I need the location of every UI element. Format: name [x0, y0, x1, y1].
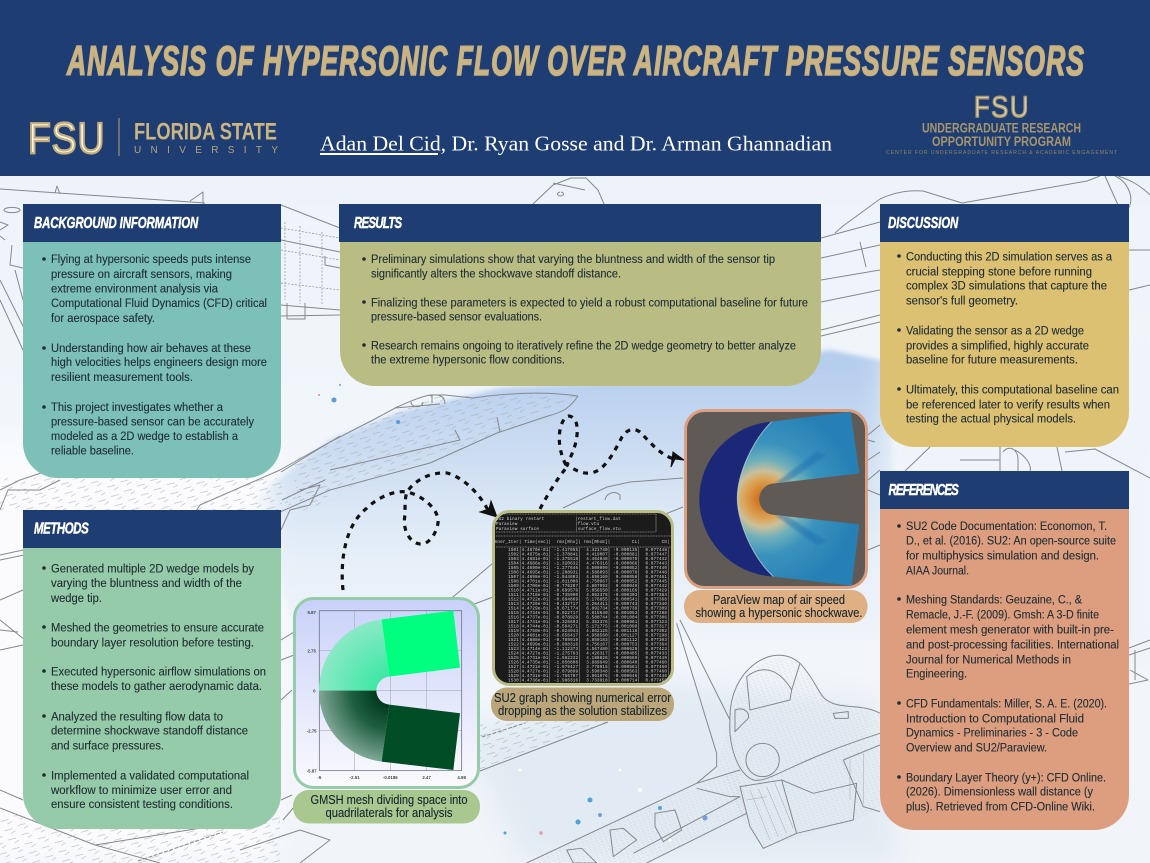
figure: SU2 terminal residual output: 1505|4.4690e-01| -1.277646| 4.500999| -0.000052| 0.077440| — [492, 566, 670, 571]
text: discussion bullets: sensor's full geometry. — [906, 294, 1018, 308]
text: references bullets: D., et al. (2016). SU2: An open-source suite — [906, 534, 1116, 548]
figure: SU2 terminal residual output: 1525|4.4731e-01| -1.562232| 4.188826| -0.000569| 0.077449| — [492, 656, 670, 661]
logo: Undergraduate Research Opportunity Program — [886, 90, 1118, 156]
text: references bullets: (2026). Dimensionless wall distance (y — [906, 784, 1094, 798]
caption: ParaView map: showing a hypersonic shockwave. — [696, 606, 862, 620]
background: top-left aircraft line drawing — [0, 186, 340, 350]
caption: SU2 graph — [491, 688, 674, 721]
figure: SU2 terminal residual output — [492, 512, 672, 684]
plot axis tick labels — [307, 610, 466, 780]
text: references bullets: Meshing Standards: Geuzaine, C., & — [906, 592, 1083, 606]
text: discussion bullets: Ultimately, this computational baseline can — [906, 382, 1119, 396]
figure: SU2 terminal residual output: 1518|4.4744e-01| -0.594271| 5.171775| -0.001098| 0.077317| — [492, 624, 670, 630]
figure: SU2 terminal residual output: Paraview surface — [496, 527, 539, 532]
figure: SU2 terminal residual output: 1516|4.4737e-01| -0.078929| 6.580744| -0.001004| 0.077306| — [492, 616, 670, 620]
header banner — [0, 0, 1150, 176]
figure: SU2 terminal residual output: 1514|4.4729e-01| -0.671774| 6.892734| -0.000739| 0.077309| — [492, 606, 670, 612]
caption: SU2 graph: SU2 graph showing numerical error — [494, 691, 671, 705]
heading: methods: METHODS — [34, 520, 89, 537]
text: methods bullets: Analyzed the resulting flow data to — [51, 710, 223, 724]
text: references bullets: Journal for Numerical Methods in — [906, 652, 1071, 666]
figure: SU2 terminal residual output: 1528|4.4727e-01| -2.079899| 3.590348| -0.000563| 0.077460| — [492, 670, 670, 674]
text: results bullets: the extreme hypersonic flow conditions. — [371, 352, 565, 366]
text: discussion bullets: testing the actual physical models. — [906, 412, 1076, 426]
background: top-right aircraft line drawing — [533, 176, 1150, 684]
text: methods bullets: Generated multiple 2D wedge models by — [51, 562, 255, 576]
figure: SU2 terminal residual output: 1511|4.4716e-01| -0.735990| 4.962376| -0.000303| 0.077384| — [492, 593, 670, 598]
text: methods bullets: these models to gather aerodynamic data. — [51, 679, 262, 693]
text: discussion bullets — [897, 250, 1119, 426]
text: methods bullets: determine shockwave standoff distance — [51, 724, 248, 738]
figure: SU2 terminal residual output: 1504|4.4686e-01| -1.320632| 4.476316| -0.000066| 0.077443| — [492, 562, 670, 566]
plot axis tick labels: -2.75 — [307, 728, 317, 733]
figure: SU2 terminal residual output: 1508|4.4701e-01| -1.011006| 4.750967| -0.000052| 0.077445| — [492, 580, 670, 584]
text: methods bullets: ensure consistent testing conditions. — [51, 797, 233, 811]
figure: SU2 terminal residual output: 1530|4.4736e-01| -1.986316| 3.733918| -0.000714| 0.077456| — [492, 678, 670, 684]
text: methods bullets — [42, 562, 266, 811]
text: background bullets: extreme environment analysis via — [51, 282, 218, 296]
panel: references — [880, 471, 1129, 830]
caption: ParaView map — [684, 590, 868, 623]
heading: results: RESULTS — [354, 214, 402, 231]
title: ANALYSIS OF HYPERSONIC FLOW OVER AIRCRAFT PRESSURE SENSORS — [66, 38, 1084, 85]
text: background bullets: This project investigates whether a — [51, 400, 223, 414]
text: results bullets — [362, 252, 808, 366]
figure: SU2 terminal residual output: 1524|4.4727e-01| -1.275763| 4.426317| -0.000485| 0.077433| — [492, 652, 670, 656]
figure: SU2 terminal residual output: 1502|4.4675e-01| -1.378841| 4.419007| -0.000081| 0.077447| — [492, 552, 670, 558]
logo: Undergraduate Research Opportunity Program: OPPORTUNITY PROGRAM — [932, 134, 1071, 149]
panel: discussion — [880, 204, 1129, 447]
background: centre jet line drawing — [0, 393, 578, 660]
heading: background information: BACKGROUND INFORMATION — [34, 214, 199, 231]
figure: SU2 terminal residual output: 1506|4.4695e-01| -1.208931| 4.586093| -0.000078| 0.077448| — [492, 570, 670, 576]
text: references bullets — [897, 519, 1119, 814]
figure: SU2 terminal residual output: 1515|4.4734e-01| 0.022717| 6.615640| -0.001053| 0.077288| — [492, 611, 670, 616]
text: background bullets: resilient measurement tools. — [51, 370, 193, 384]
figure: SU2 terminal residual output: 1522|4.4699e-01| -0.998316| 4.756167| -0.000753| 0.077364| — [492, 642, 670, 648]
text: results bullets: pressure-based sensor evaluations. — [371, 310, 542, 324]
authors: Adan Del Cid, Dr. Ryan Gosse and Dr. Arman Ghannadian — [320, 132, 833, 156]
plot axis tick labels: -5.87 — [307, 768, 317, 773]
text: references bullets: Engineering. — [906, 666, 967, 680]
text: background bullets: modeled as a 2D wedge to establish a — [51, 429, 238, 443]
logo: Florida State University — [28, 113, 278, 163]
plot axis tick labels: 0 — [313, 688, 316, 693]
text: references bullets: Remacle, J.-F. (2009). Gmsh: A 3-D finite — [906, 608, 1099, 622]
arrow: dashed path from terminal to ParaView — [540, 416, 684, 509]
caption: GMSH mesh — [293, 790, 480, 824]
text: discussion bullets: crucial stepping stone before running — [906, 264, 1092, 278]
text: methods bullets: workflow to minimize user error and — [50, 783, 232, 797]
figure: SU2 terminal residual output: 1526|4.4735e-01| -1.850808| 3.889949| -0.000640| 0.077460| — [492, 660, 670, 666]
figure: SU2 terminal residual output: |restart_flow.dat — [575, 517, 621, 522]
panel: methods — [23, 510, 281, 829]
text: methods bullets: varying the bluntness and width of the — [51, 576, 242, 590]
logo: Undergraduate Research Opportunity Program: CENTER FOR UNDERGRADUATE RESEARCH & ACADEMIC ENGAGEMENT — [886, 150, 1118, 156]
text: discussion bullets: baseline for future measurements. — [906, 352, 1078, 366]
text: methods bullets: Implemented a validated computational — [51, 768, 249, 782]
text: background bullets: pressure on aircraft sensors, making — [51, 267, 232, 281]
text: methods bullets: Executed hypersonic airflow simulations on — [51, 664, 266, 678]
text: references bullets: Overview and SU2/Paraview. — [906, 740, 1047, 754]
figure: SU2 terminal residual output: 1503|4.4681e-01| -1.375518| 4.464048| -0.000079| 0.077442| — [492, 557, 670, 562]
figure: SU2 terminal residual output: 1517|4.4741e-01| -0.326693| 5.352376| -0.000961| 0.077323| — [492, 620, 670, 625]
text: methods bullets: boundary layer resolution before testing. — [51, 636, 254, 650]
text: results bullets: significantly alters the shockwave standoff distance. — [371, 266, 621, 280]
text: methods bullets: and surface pressures. — [51, 738, 164, 752]
plot axis tick labels: -5 — [317, 775, 322, 780]
text: methods bullets: Meshed the geometries to ensure accurate — [51, 620, 264, 634]
text: discussion bullets: be referenced later to verify results when — [906, 398, 1110, 412]
text: results bullets: Finalizing these parameters is expected to yield a robust computational baseline for future — [371, 296, 808, 310]
text: references bullets: plus). Retrieved from CFD-Online Wiki. — [906, 800, 1095, 814]
figure: SU2 terminal residual output: 1527|4.4721e-01| -1.979427| 3.778915| -0.000561| 0.077460| — [492, 665, 670, 670]
text: background bullets: Computational Fluid Dynamics (CFD) critical — [51, 296, 267, 310]
text: references bullets: Boundary Layer Theory (y+): CFD Online. — [906, 770, 1106, 784]
logo: Florida State University: FLORIDA STATE — [134, 118, 277, 146]
figure: SU2 terminal residual output: 1521|4.4688e-01| -0.789919| 4.859183| -0.001112| 0.077303| — [492, 638, 670, 643]
text: references bullets: Introduction to Computational Fluid — [906, 712, 1084, 726]
plot axis tick labels: 5.87 — [307, 610, 316, 615]
logo: Florida State University: FSU — [28, 113, 105, 163]
logo: Undergraduate Research Opportunity Program: FSU — [974, 90, 1028, 123]
text: discussion bullets: provides a simplified, highly accurate — [906, 338, 1089, 352]
text: references bullets: AIAA Journal. — [906, 564, 969, 578]
caption: SU2 graph: dropping as the solution stabilizes — [498, 704, 667, 718]
logo: Florida State University: UNIVERSITY — [134, 145, 278, 156]
background: bottom-right aircraft line drawing — [527, 620, 880, 863]
figure: SU2 terminal residual output: Paraview — [496, 522, 518, 527]
plot axis tick labels: 2.47 — [422, 775, 431, 780]
panel: results — [339, 204, 821, 386]
text: background bullets: Understanding how air behaves at these — [51, 341, 251, 355]
figure: SU2 terminal residual output: 1501|4.4670e-01| -1.417055| 4.421740| -0.000135| 0.077448| — [492, 548, 670, 553]
figure: SU2 terminal residual output: 1513|4.4726e-01| -0.432717| 5.264411| -0.000743| 0.077340| — [492, 602, 670, 607]
figure: SU2 terminal residual output: SU2 binary restart — [496, 517, 545, 522]
figure: SU2 terminal residual output: 1507|4.4698e-01| -1.044603| 4.696169| 0.000058| 0.077461| — [492, 575, 670, 580]
figure: SU2 terminal residual output: 1509|4.4706e-01| -0.776207| 4.807992| 0.000049| 0.077442| — [492, 584, 670, 589]
heading: references: REFERENCES — [888, 481, 959, 498]
text: results bullets: Preliminary simulations show that varying the bluntness and width of the sensor tip — [371, 252, 775, 266]
plot axis tick labels: 4.98 — [457, 775, 466, 780]
text: background bullets: reliable baseline. — [51, 444, 134, 458]
text: results bullets: Research remains ongoing to iteratively refine the 2D wedge geometry to better analyze — [371, 338, 796, 352]
caption: ParaView map: ParaView map of air speed — [713, 593, 845, 607]
caption: GMSH mesh: GMSH mesh dividing space into — [310, 793, 468, 807]
text: references bullets: and post-processing facilities. International — [906, 638, 1119, 652]
heading: discussion: DISCUSSION — [888, 214, 959, 231]
figure: ParaView air speed map — [686, 410, 866, 588]
text: background bullets: Flying at hypersonic speeds puts intense — [51, 252, 251, 266]
text: references bullets: element mesh generator with built-in pre- — [906, 622, 1114, 636]
text: background bullets: high velocities helps engineers design more — [51, 355, 267, 369]
figure: GMSH mesh plot — [294, 598, 478, 788]
figure: SU2 terminal residual output: |surface_flow.vtu — [575, 527, 621, 532]
figure: SU2 terminal residual output: 1512|4.4722e-01| -0.694869| 5.176855| -0.000541| 0.077368| — [492, 598, 670, 602]
text: background bullets: for aerospace safety. — [51, 311, 155, 325]
plot axis tick labels: -0.0186 — [383, 775, 398, 780]
logo: Undergraduate Research Opportunity Program: UNDERGRADUATE RESEARCH — [922, 120, 1081, 136]
figure: SU2 terminal residual output: 1529|4.4731e-01| -1.756707| 3.961976| -0.000646| 0.077446| — [492, 674, 670, 679]
text: discussion bullets: Validating the sensor as a 2D wedge — [906, 324, 1084, 338]
figure: SU2 terminal residual output: |flow.vtu — [575, 522, 600, 527]
text: references bullets: for multiphysics simulation and design. — [906, 548, 1099, 562]
figure: SU2 terminal residual output: 1519|4.4750e-01| -0.624944| 4.862125| -0.001116| 0.077302| — [492, 629, 670, 634]
arrow: dashed path from mesh to terminal — [342, 473, 497, 590]
background: lower jet line drawing — [0, 478, 683, 863]
panel: background information — [23, 204, 281, 478]
caption: GMSH mesh: quadrilaterals for analysis — [326, 806, 452, 820]
text: references bullets: SU2 Code Documentation: Economon, T. — [906, 519, 1107, 533]
text: references bullets: CFD Fundamentals: Miller, S. A. E. (2020). — [906, 696, 1107, 710]
text: discussion bullets: Conducting this 2D simulation serves as a — [906, 250, 1112, 264]
background: watercolor sky — [0, 176, 1150, 863]
text: background bullets — [42, 252, 267, 458]
figure: SU2 terminal residual output: 1520|4.4681e-01| -0.656417| 4.958560| -0.001127| 0.077298| — [492, 634, 670, 638]
text: discussion bullets: complex 3D simulations that capture the — [906, 278, 1107, 292]
plot axis tick labels: 2.75 — [307, 648, 316, 653]
text: references bullets: Dynamics - Preliminaries - 3 - Code — [906, 726, 1078, 740]
figure: SU2 terminal residual output: 1510|4.4711e-01| -0.699576| 5.056550| -0.000166| 0.077429| — [492, 588, 670, 594]
text: methods bullets: wedge tip. — [50, 591, 102, 605]
plot axis tick labels: -2.51 — [350, 775, 360, 780]
background: paint speckles — [318, 384, 708, 842]
figure: SU2 terminal residual output: Inner_Iter| Time(sec)| rms[Rho]| rms[RhoE]| CL| CD| — [492, 540, 670, 545]
figure: SU2 terminal residual output: 1523|4.4714e-01| -1.112373| 4.567480| -0.000628| 0.077423| — [492, 647, 670, 652]
text: background bullets: pressure-based sensor can be accurately — [51, 414, 255, 428]
